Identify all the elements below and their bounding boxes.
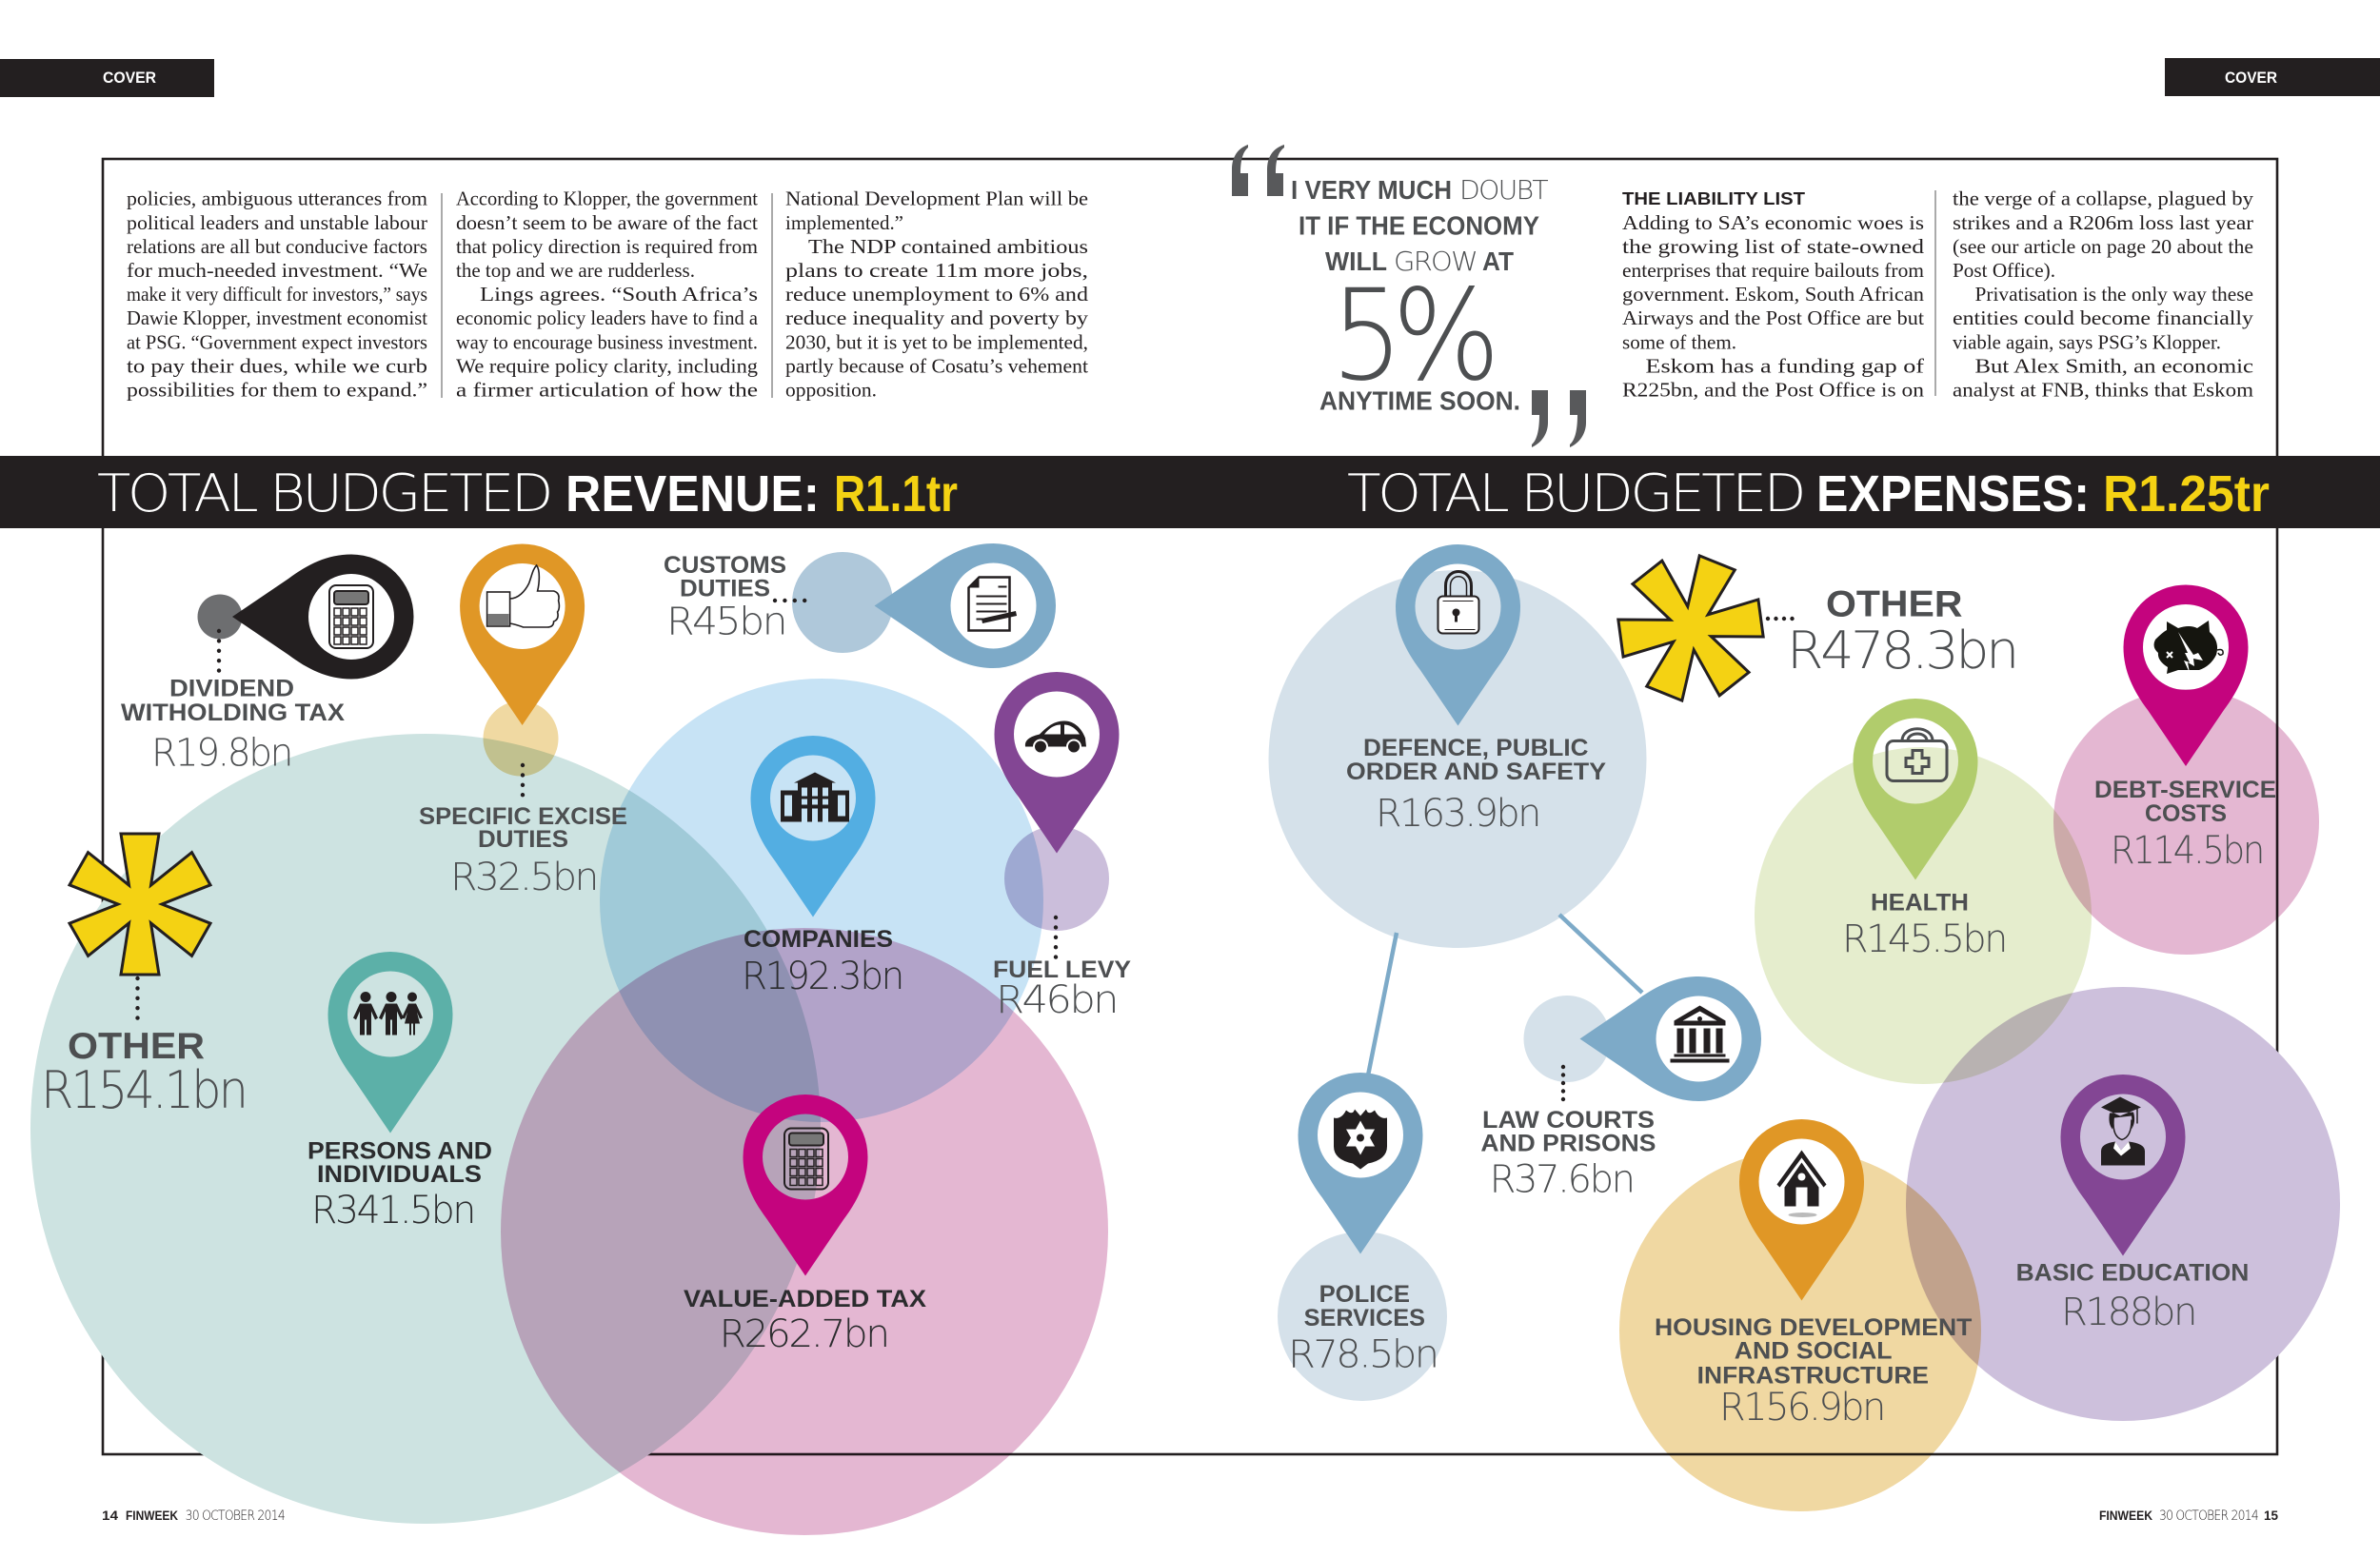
- label: police services: POLICE: [1319, 1281, 1410, 1308]
- heading: total budgeted revenue: [97, 463, 958, 523]
- pin: customs duties: [874, 543, 1056, 668]
- label: specific excise duties: R32.5bn: [450, 856, 597, 899]
- label: revenue other: R154.1bn: [41, 1060, 246, 1120]
- article text: column 2: doesn’t seem to be aware of the fact: [456, 211, 758, 234]
- footer: right folio: 15: [2264, 1508, 2278, 1523]
- sidebar: the liability list, column 1: Eskom has a funding gap of: [1645, 354, 1924, 377]
- heading: total budgeted revenue: REVENUE:: [565, 465, 820, 523]
- article text: column 3: opposition.: [785, 379, 877, 402]
- article text: column 2: that policy direction is required from: [456, 235, 758, 258]
- label: value-added tax: R262.7bn: [720, 1312, 888, 1356]
- sidebar: the liability list, column 2: [1953, 187, 2254, 402]
- article text: column 2: the top and we are rudderless.: [456, 259, 695, 282]
- label: specific excise duties: DUTIES: [478, 826, 568, 853]
- heading: total budgeted expenses: EXPENSES:: [1816, 465, 2090, 523]
- pull quote: ANYTIME SOON.: [1319, 386, 1520, 416]
- connector dots: revenue: [137, 601, 1056, 1018]
- circle: customs duties: [792, 552, 893, 653]
- icon: building: [781, 773, 849, 822]
- article text: column 3: reduce inequality and poverty by: [785, 306, 1089, 329]
- icon: yellow asterisk, revenue other: [69, 834, 210, 975]
- pull quote: AT: [1482, 247, 1514, 276]
- heading: total budgeted revenue: TOTAL BUDGETED: [97, 463, 550, 523]
- sidebar: the liability list, column 2: But Alex Smith, an economic: [1974, 354, 2253, 377]
- pull quote: DOUBT: [1459, 174, 1549, 206]
- article text: column 1: possibilities for them to expand.”: [127, 379, 427, 402]
- circle: persons and individuals: [30, 734, 821, 1524]
- label: law courts and prisons: LAW COURTS: [1482, 1107, 1655, 1134]
- label: housing development and social infrastructure: [1655, 1314, 1972, 1430]
- sidebar: the liability list, column 2: entities could become financially: [1953, 306, 2254, 329]
- sidebar: the liability list, column 1: [1622, 188, 1925, 402]
- footer: right folio: 30 OCTOBER 2014: [2159, 1509, 2258, 1524]
- article text: column 2: We require policy clarity, including: [456, 354, 759, 377]
- label: basic education: BASIC EDUCATION: [2016, 1260, 2249, 1287]
- icon: courthouse: [1670, 1005, 1729, 1062]
- footer: left folio: FINWEEK: [126, 1508, 178, 1523]
- label: debt-service costs: [2094, 777, 2276, 873]
- label: dividend witholding tax: WITHOLDING TAX: [121, 700, 345, 726]
- label: expenses other: [1787, 584, 2016, 680]
- article text: column 1: Dawie Klopper, investment economist: [127, 306, 427, 329]
- label: customs duties: CUSTOMS: [664, 552, 786, 579]
- article text: column 1: political leaders and unstable labour: [127, 211, 427, 234]
- label: dividend witholding tax: DIVIDEND: [169, 675, 294, 701]
- label: health: R145.5bn: [1842, 917, 2006, 961]
- circle: specific excise duties: [484, 700, 558, 777]
- sidebar: the liability list, column 2: Post Office).: [1953, 259, 2055, 282]
- icon: thumbs up: [487, 565, 559, 627]
- icon: house: [1776, 1150, 1826, 1217]
- article text: column 2: Lings agrees. “South Africa’s: [480, 283, 758, 306]
- label: revenue other: [41, 1026, 246, 1120]
- pull quote: WILL: [1325, 247, 1387, 276]
- label: companies: [742, 926, 902, 998]
- label: housing development and social infrastructure: R156.9bn: [1719, 1386, 1884, 1430]
- article text: column 1: [127, 187, 427, 402]
- heading: total budgeted expenses: TOTAL BUDGETED: [1347, 463, 1803, 523]
- pull quote: 5%: [1331, 263, 1492, 409]
- icon: calculator: [784, 1129, 828, 1190]
- pin: fuel levy: [994, 672, 1120, 853]
- heading band: [0, 456, 2380, 528]
- icon: document and pen: [969, 577, 1017, 630]
- heading: total budgeted expenses: R1.25tr: [2103, 465, 2270, 523]
- heading: total budgeted revenue: R1.1tr: [834, 465, 958, 523]
- label: housing development and social infrastructure: HOUSING DEVELOPMENT: [1655, 1314, 1972, 1341]
- footer: left folio: 30 OCTOBER 2014: [186, 1509, 285, 1524]
- circle: fuel levy: [1004, 826, 1109, 931]
- footer: left folio: 14: [102, 1508, 118, 1523]
- icon: opening quote mark: [1232, 145, 1284, 196]
- pin: health: [1853, 699, 1978, 879]
- label: specific excise duties: SPECIFIC EXCISE: [419, 803, 627, 830]
- label: dividend witholding tax: R19.8bn: [151, 732, 291, 776]
- connector dots: expenses: [1563, 619, 1800, 1101]
- circle: basic education: [1906, 987, 2340, 1421]
- circle: housing development: [1619, 1150, 1981, 1511]
- section tab: right cover: [2165, 58, 2380, 96]
- label: expenses other: OTHER: [1826, 584, 1963, 624]
- label: basic education: [2016, 1260, 2249, 1334]
- article text: column 3: The NDP contained ambitious: [808, 235, 1088, 258]
- sidebar: the liability list, column 1: some of them.: [1622, 330, 1736, 353]
- article text: column 3: 2030, but it is yet to be implemented,: [785, 330, 1088, 353]
- label: law courts and prisons: AND PRISONS: [1480, 1131, 1656, 1157]
- label: fuel levy: R46bn: [996, 978, 1117, 1022]
- footer: left folio: [102, 1508, 285, 1524]
- pin: persons and individuals: [327, 952, 453, 1133]
- connector: defence to law courts: [1559, 915, 1642, 993]
- article text: column 3: reduce unemployment to 6% and: [785, 283, 1089, 306]
- label: law courts and prisons: [1480, 1107, 1656, 1201]
- icon: police badge: [1334, 1110, 1387, 1169]
- article text: column 3: [785, 187, 1089, 402]
- article text: column 3: partly because of Cosatu’s vehement: [785, 354, 1088, 377]
- label: companies: COMPANIES: [744, 926, 893, 953]
- label: persons and individuals: PERSONS AND: [307, 1138, 492, 1165]
- circle: companies: [600, 679, 1043, 1122]
- article text: column 3: plans to create 11m more jobs,: [785, 259, 1088, 282]
- label: defence, public order and safety: ORDER AND SAFETY: [1346, 759, 1606, 785]
- label: fuel levy: [993, 956, 1131, 1022]
- circle: value-added tax: [501, 928, 1108, 1535]
- icon: graduate: [2101, 1096, 2145, 1165]
- label: value-added tax: VALUE-ADDED TAX: [684, 1286, 926, 1312]
- label: customs duties: R45bn: [666, 600, 785, 643]
- label: persons and individuals: R341.5bn: [311, 1189, 474, 1233]
- circle: dividend witholding tax: [198, 594, 242, 640]
- section tab: left cover: COVER: [103, 69, 156, 87]
- connector: defence to police: [1368, 933, 1397, 1075]
- article text: column 2: a firmer articulation of how the: [456, 379, 758, 402]
- heading: total budgeted expenses: [1347, 463, 2270, 523]
- label: health: HEALTH: [1871, 889, 1969, 916]
- sidebar: the liability list, column 1: enterprises that require bailouts from: [1622, 259, 1924, 282]
- article text: column 3: implemented.”: [785, 211, 903, 234]
- article text: column 2: economic policy leaders have to find a: [456, 306, 759, 329]
- label: health: [1842, 889, 2006, 961]
- label: police services: [1288, 1281, 1438, 1377]
- icon: car: [1025, 721, 1086, 754]
- label: debt-service costs: COSTS: [2145, 800, 2227, 827]
- label: companies: R192.3bn: [742, 955, 902, 998]
- sidebar: the liability list, column 2: the verge of a collapse, plagued by: [1953, 187, 2254, 210]
- label: customs duties: [664, 552, 786, 643]
- article text: column 2: [456, 187, 759, 402]
- label: law courts and prisons: R37.6bn: [1490, 1157, 1634, 1201]
- label: police services: R78.5bn: [1288, 1333, 1438, 1377]
- circle: police services: [1278, 1232, 1447, 1401]
- pin: basic education: [2060, 1075, 2186, 1256]
- article text: column 2: According to Klopper, the government: [456, 187, 758, 210]
- circle: defence, public order and safety: [1268, 570, 1647, 948]
- article text: column 2: way to encourage business investment.: [456, 330, 758, 353]
- label: defence, public order and safety: [1346, 735, 1606, 836]
- pin: law courts and prisons: [1580, 976, 1761, 1101]
- label: debt-service costs: DEBT-SERVICE: [2094, 777, 2276, 803]
- pin: housing development and social infrastructure: [1739, 1119, 1864, 1300]
- label: defence, public order and safety: R163.9bn: [1376, 792, 1539, 836]
- expenses bubble chart: [1268, 537, 2340, 1511]
- sidebar: the liability list, column 1: Airways and the Post Office are but: [1622, 306, 1924, 329]
- pin: debt-service costs: [2123, 584, 2249, 766]
- circle: health: [1755, 747, 2092, 1084]
- label: value-added tax: [684, 1286, 926, 1356]
- icon: padlock: [1438, 571, 1479, 634]
- pin: dividend witholding tax: [232, 554, 413, 680]
- pin: specific excise duties: [460, 544, 585, 725]
- pin: defence, public order and safety: [1396, 544, 1520, 725]
- article text: column 1: at PSG. “Government expect investors: [127, 330, 427, 353]
- sidebar: the liability list, column 1: R225bn, and the Post Office is on: [1622, 379, 1925, 402]
- icon: medical bag: [1887, 729, 1947, 780]
- article text: column 1: to pay their dues, while we curb: [127, 354, 427, 377]
- label: dividend witholding tax: [121, 675, 345, 776]
- label: fuel levy: FUEL LEVY: [993, 956, 1131, 983]
- icon: yellow asterisk, expenses other: [1599, 537, 1782, 720]
- sidebar: the liability list, column 1: government. Eskom, South African: [1622, 283, 1925, 306]
- pin: police services: [1299, 1073, 1422, 1254]
- article text: column 1: relations are all but conducive factors: [127, 235, 427, 258]
- sidebar: the liability list, column 2: analyst at FNB, thinks that Eskom: [1953, 379, 2253, 402]
- label: revenue other: OTHER: [68, 1026, 205, 1067]
- article text: column 3: National Development Plan will be: [785, 187, 1088, 210]
- section tab: right cover: COVER: [2225, 69, 2277, 87]
- pin: companies: [750, 736, 876, 917]
- icon: broken piggy bank: [2154, 621, 2223, 674]
- sidebar: the liability list, column 1: THE LIABILITY LIST: [1622, 188, 1806, 208]
- label: basic education: R188bn: [2061, 1291, 2195, 1334]
- sidebar: the liability list, column 1: the growing list of state-owned: [1622, 235, 1925, 258]
- circle: debt-service costs: [2053, 689, 2319, 955]
- label: police services: SERVICES: [1304, 1305, 1425, 1331]
- icon: closing quote mark: [1532, 390, 1586, 447]
- section tab: left cover: [0, 59, 214, 97]
- pull quote: IT IF THE ECONOMY: [1299, 211, 1539, 241]
- article text: column 1: policies, ambiguous utterances from: [127, 187, 427, 210]
- label: persons and individuals: INDIVIDUALS: [317, 1161, 482, 1188]
- pull quote: I VERY MUCH: [1291, 175, 1452, 205]
- pull quote: [1232, 145, 1586, 447]
- label: persons and individuals: [307, 1138, 492, 1233]
- label: expenses other: R478.3bn: [1787, 621, 2016, 680]
- icon: calculator: [329, 585, 373, 648]
- pin: value-added tax: [743, 1095, 868, 1275]
- circle: law courts and prisons: [1523, 996, 1611, 1082]
- label: customs duties: DUTIES: [680, 575, 770, 602]
- footer: right folio: FINWEEK: [2099, 1508, 2152, 1523]
- sidebar: the liability list, column 2: Privatisation is the only way these: [1974, 283, 2253, 306]
- sidebar: the liability list, column 2: viable again, says PSG’s Klopper.: [1953, 330, 2221, 353]
- label: specific excise duties: [419, 803, 627, 899]
- footer: right folio: [2099, 1508, 2278, 1524]
- label: debt-service costs: R114.5bn: [2111, 829, 2263, 873]
- article text: column 1: make it very difficult for investors,” says: [127, 283, 427, 306]
- label: housing development and social infrastructure: AND SOCIAL: [1735, 1338, 1893, 1365]
- revenue bubble chart: [30, 543, 1131, 1535]
- sidebar: the liability list, column 1: Adding to SA’s economic woes is: [1622, 211, 1924, 234]
- icon: three people: [353, 992, 423, 1035]
- sidebar: the liability list, column 2: (see our article on page 20 about the: [1953, 235, 2253, 258]
- pull quote: GROW: [1394, 246, 1477, 277]
- label: housing development and social infrastructure: INFRASTRUCTURE: [1697, 1362, 1929, 1389]
- article text: column 1: for much-needed investment. “We: [127, 259, 427, 282]
- label: defence, public order and safety: DEFENCE, PUBLIC: [1363, 735, 1588, 761]
- sidebar: the liability list, column 2: strikes and a R206m loss last year: [1953, 211, 2253, 234]
